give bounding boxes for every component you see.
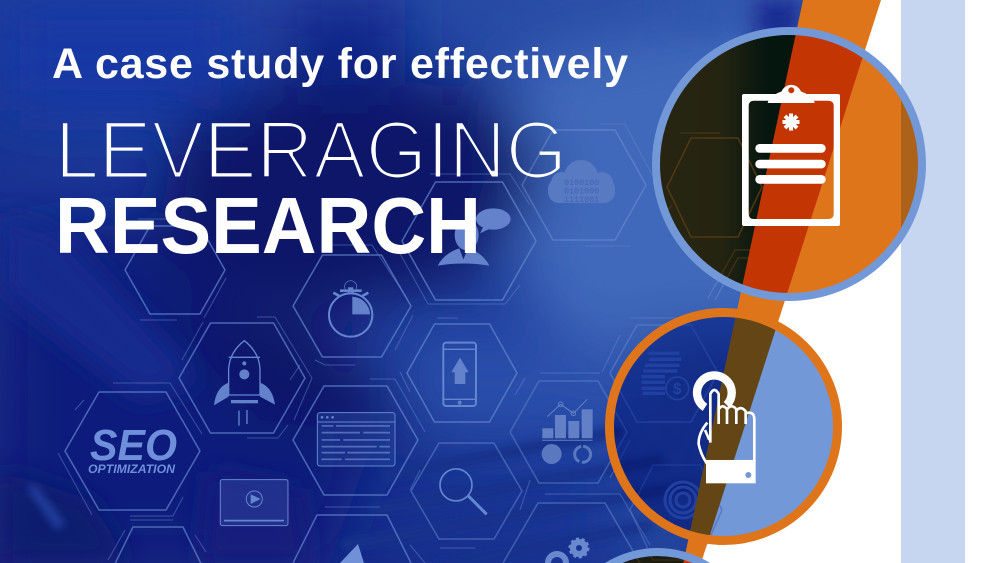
hexagon: coins <box>602 318 718 422</box>
icon: coins and dollar: $ <box>673 381 682 398</box>
icon: bar chart with pie and donut <box>542 399 593 464</box>
hexagon: magnifier <box>411 443 530 548</box>
hexagon: SEO optimization <box>58 383 202 516</box>
optimization label: OPTIMIZATION <box>88 464 176 476</box>
binary digits: 1111001 <box>564 195 599 205</box>
icon: cloud with binary digits <box>548 160 615 205</box>
hexagon: chart <box>510 373 630 483</box>
pale blue vertical stripe <box>901 0 965 563</box>
binary digits: 0100100 <box>564 178 599 188</box>
hexagon: gears <box>503 494 650 563</box>
hexagon: web document <box>290 365 425 495</box>
icon: target <box>665 482 701 518</box>
diagonal orange band <box>683 0 881 563</box>
wrist highlight <box>26 485 66 530</box>
icon: megaphone <box>340 544 364 563</box>
hexagon: data cloud <box>522 124 655 246</box>
hexagon: target <box>630 465 722 560</box>
icon: document window <box>317 413 395 466</box>
hexagon: behind clipboard circle <box>667 133 790 300</box>
hexagon: phone upload <box>400 318 525 422</box>
title: leveraging: LEVERAGING <box>55 105 567 196</box>
hexagon: upper left empty <box>125 219 226 320</box>
circle: hand tapping <box>610 312 838 540</box>
icon: rocket <box>214 341 275 426</box>
title: case study line: A case study for effectively <box>52 40 628 88</box>
darker area under clipboard circle <box>660 35 796 284</box>
icon: gears <box>548 539 588 563</box>
binary digits: 0101000 <box>564 186 599 196</box>
hexagon: bottom left empty <box>108 520 206 563</box>
SEO label: SEO <box>90 421 177 470</box>
hexagon: rocket <box>179 317 312 438</box>
icon: magnifier <box>440 469 487 514</box>
title: research: RESEARCH <box>55 181 481 270</box>
icon: medical clipboard <box>742 85 840 226</box>
hexagon: person with speech bubble <box>398 174 536 304</box>
icon: person with speech bubble <box>438 208 511 266</box>
icon: finger tap <box>697 375 756 483</box>
hexagon: megaphone <box>293 507 425 563</box>
icon: stopwatch <box>329 281 372 337</box>
hexagon: stopwatch <box>293 245 413 365</box>
circle: clipboard <box>656 31 922 297</box>
circle: third, cropped at bottom <box>605 548 710 563</box>
icon: phone with up arrow <box>443 343 476 406</box>
keyboard keys <box>345 424 692 548</box>
icon: video player <box>220 480 288 526</box>
